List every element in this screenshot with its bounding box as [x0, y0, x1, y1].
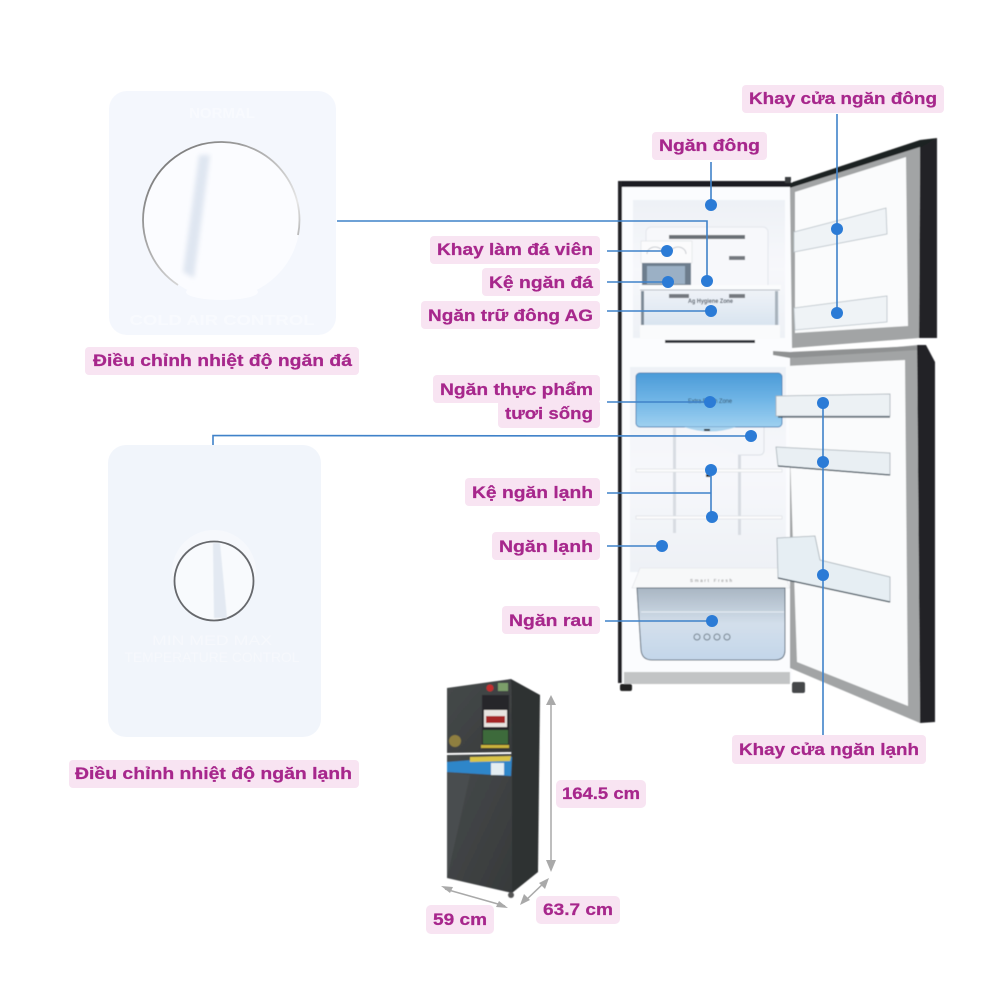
label: width 59 cm [426, 905, 494, 934]
label: height 164.5 cm [556, 780, 646, 808]
label: Khay cửa ngăn lạnh: Khay cửa ngăn lạnh [739, 740, 919, 759]
label: Ngăn thực phẩm tươi sống: Ngăn thực phẩm [440, 380, 593, 399]
leader: fresh food [607, 396, 716, 408]
fridge compartment: Smart Fresh [690, 578, 732, 583]
door stickers [482, 695, 509, 749]
label: Điều chỉnh nhiệt độ ngăn đá: Điều chỉnh nhiệt độ ngăn đá [93, 351, 353, 370]
label: Ngăn đông [652, 132, 767, 160]
leader: door freezer [831, 114, 843, 319]
panel: freezer control photo: NORMAL [189, 105, 255, 122]
label: Khay cửa ngăn đông: Khay cửa ngăn đông [749, 89, 937, 108]
leader: freezer [705, 162, 717, 211]
leader: door fridge [817, 397, 829, 735]
label: Kệ ngăn lạnh: Kệ ngăn lạnh [472, 483, 593, 502]
label: Điều chỉnh nhiệt độ ngăn đá [85, 347, 359, 375]
label: Kệ ngăn lạnh [465, 478, 600, 506]
crisper drawer [637, 588, 785, 660]
upper door [785, 138, 937, 348]
label: Ngăn lạnh [492, 532, 600, 560]
label: height 164.5 cm: 164.5 cm [562, 784, 640, 803]
leader: fridge shelves [607, 464, 718, 523]
panel: fridge control photo: MIN MED MAX [152, 632, 273, 648]
leader: ice shelf [607, 276, 674, 288]
label: Ngăn thực phẩm tươi sống: tươi sống [505, 404, 593, 423]
illustration: closed refrigerator with dimensions [447, 679, 540, 898]
label: depth 63.7 cm [536, 896, 620, 924]
label: Khay cửa ngăn lạnh [732, 735, 926, 764]
label: Ngăn lạnh: Ngăn lạnh [499, 537, 593, 556]
arrow: depth [520, 878, 549, 905]
crisper cover [632, 568, 790, 588]
arrow: width [441, 886, 508, 908]
label: width 59 cm: 59 cm [433, 910, 487, 929]
label: depth 63.7 cm: 63.7 cm [543, 900, 613, 919]
fridge body [618, 181, 805, 693]
leader: fridge [607, 540, 668, 552]
label: Khay làm đá viên [430, 236, 600, 264]
label: Khay cửa ngăn đông [742, 85, 944, 113]
freezer compartment: Ag Hygiene Zone [688, 299, 734, 305]
panel: freezer control photo: COLD AIR CONTROL [130, 312, 314, 329]
label: Ngăn thực phẩm tươi sống [433, 375, 600, 428]
freezer shelf [639, 285, 781, 290]
panel: freezer control photo [109, 91, 336, 335]
fridge compartment [630, 367, 790, 660]
AG drawer [641, 291, 779, 325]
leader: freezer control [337, 221, 713, 287]
leader: fridge control [213, 430, 757, 445]
fridge shelves [636, 469, 782, 472]
label: Điều chỉnh nhiệt độ ngăn lạnh: Điều chỉnh nhiệt độ ngăn lạnh [75, 764, 352, 783]
leader: ice tray [607, 245, 673, 257]
illustration: open refrigerator [618, 138, 937, 723]
freezer compartment [633, 200, 785, 343]
label: Kệ ngăn đá: Kệ ngăn đá [489, 273, 594, 292]
label: Điều chỉnh nhiệt độ ngăn lạnh [69, 760, 359, 788]
label: Kệ ngăn đá [482, 268, 600, 296]
leader: AG freezer [607, 305, 717, 317]
lower door [773, 345, 935, 723]
label: Ngăn đông: Ngăn đông [659, 136, 760, 155]
label: Ngăn trữ đông AG: Ngăn trữ đông AG [428, 306, 593, 325]
label: Ngăn rau: Ngăn rau [509, 611, 593, 630]
panel: fridge control photo: TEMPERATURE CONTROL [124, 649, 300, 665]
arrow: height [546, 695, 556, 872]
leader lines and markers [213, 114, 843, 735]
lower door shelves [776, 394, 890, 416]
fridge compartment: Extra Fresh Zone [688, 398, 732, 405]
label: Ngăn rau [502, 606, 600, 634]
label: Khay làm đá viên: Khay làm đá viên [437, 240, 593, 259]
fresh food box [636, 373, 782, 427]
label: Ngăn trữ đông AG [421, 301, 600, 329]
ice tray [641, 241, 692, 263]
leader: vegetable [605, 615, 718, 627]
panel: fridge control photo [108, 445, 321, 737]
upper door shelves [794, 208, 887, 252]
